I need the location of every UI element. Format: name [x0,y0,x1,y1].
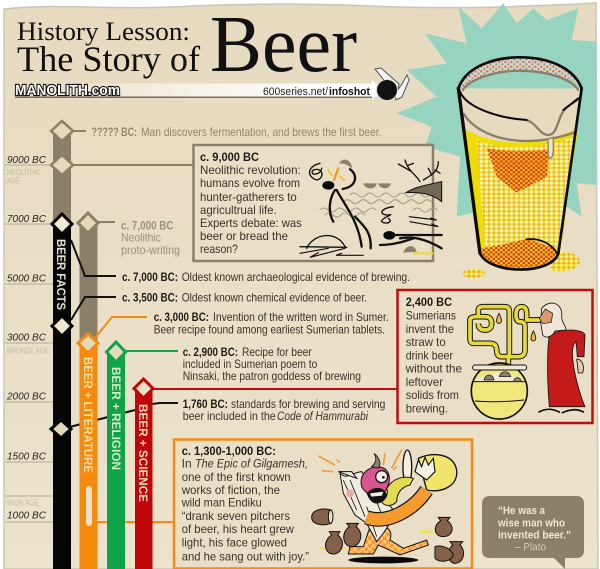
starburst behind glass [397,3,597,217]
scale of years: 7000 BC [7,214,47,225]
panel: epic of gilgamesh: wild man Endiku [181,496,262,510]
text: written word: Invention of the written word in Sumer. [213,311,389,324]
text: written word: c. 3,000 BC: [154,311,209,324]
title: History Lesson: [17,17,190,46]
panel: sumerian straw: straw to [406,336,446,349]
callout: plato quote: “He was a [498,505,546,517]
panel: epic of gilgamesh: one of the first known [182,471,291,484]
panel: epic of gilgamesh: of beer, his heart grew [182,523,295,536]
text: archaeological evidence: Oldest known archaeological evidence of brewing. [182,271,410,284]
text: chemical evidence: Oldest known chemical evidence of beer. [182,292,367,304]
panel: sumerian straw: leftover [406,376,443,389]
scale of years: AGE [7,176,20,186]
text: sumerian poem [183,346,361,383]
panel: neolithic revolution: beer or bread the [200,230,288,243]
banner: manolith and infoshot url: MANOLITH.com [15,82,120,99]
timeline bar: beer + literature: BEER + LITERATURE [81,357,95,473]
title: Beer [210,0,357,89]
text: sumerian poem: included in Sumerian poem to [183,358,317,371]
text: hammurabi: Code of Hammurabi [277,410,368,423]
panel: sumerian straw: 2,400 BC [406,296,453,309]
title: The Story of [17,39,200,79]
panel: sumerian straw: drink beer [406,350,453,362]
text: proto-writing: c. 7,000 BC [121,220,174,232]
panel: neolithic revolution: Neolithic revolution: [200,164,301,177]
banner: manolith and infoshot url: 600series.net/ [263,86,329,98]
timeline bar: beer + religion: BEER + RELIGION [109,367,123,470]
panel: sumerian straw: without the [405,362,462,376]
text: sumerian poem: Ninsaki, the patron goddess of brewing [183,370,361,383]
panel: epic of gilgamesh: c. 1,300-1,000 BC: [182,445,276,458]
panel: sumerian straw: solids from [406,389,459,402]
panel: sumerian straw: invent the [406,323,454,336]
connector lines behind bars [62,131,398,522]
text: proto-writing: proto-writing [121,244,180,257]
panel: neolithic revolution: hunter-gatherers to [200,191,297,204]
timeline bar: beer facts: BEER FACTS [54,239,68,310]
connector lines over gray bar [71,240,147,338]
text: hammurabi: 1,760 BC: [183,398,228,411]
panel: sumerian straw: Sumerians [406,310,456,322]
panel: epic of gilgamesh [174,440,472,568]
panel: epic of gilgamesh: The Epic of Gilgamesh, [195,458,308,470]
timeline bar: beer facts [51,121,73,569]
scale of years: 2000 BC [6,392,47,402]
text: sumerian poem: Recipe for beer [242,346,312,359]
timeline bar: beer + science [134,379,153,569]
timeline bar: beer + literature [78,213,98,569]
illustration: beer glass [458,57,582,278]
illustration: endiku drinking [312,450,464,563]
scale of years: BRONZE AGE [7,346,49,356]
panel: neolithic revolution: Experts debate: was [200,217,302,230]
scale of years: IRON AGE [7,498,39,508]
panel: epic of gilgamesh: light, his face glowed [182,536,287,550]
panel: epic of gilgamesh: and he sang out with joy.” [182,550,309,564]
panel: epic of gilgamesh: “drank seven pitchers [182,510,290,523]
text: hammurabi: beer included in the [183,410,276,423]
text: written word [154,311,389,336]
panel: neolithic revolution: c. 9,000 BC [200,151,260,164]
spilled beer puddles [463,252,580,278]
scale of years: 3000 BC [7,332,47,344]
text: hammurabi: standards for brewing and serving [231,398,385,411]
panel: epic of gilgamesh: works of fiction, the [181,484,280,497]
text: fermentation: ????? BC: [92,126,137,139]
panel: neolithic revolution [194,145,442,261]
callout: plato quote [482,496,584,569]
panel: neolithic revolution: agricultrual life. [200,204,277,217]
scale of years: 1000 BC [7,510,47,522]
text: chemical evidence: c. 3,500 BC: [122,292,178,304]
scale of years: NEOLITHIC [7,167,41,177]
panel: neolithic revolution: humans evolve from [200,177,300,190]
text: proto-writing: Neolithic [121,232,161,244]
panel: sumerian straw: brewing. [406,402,448,416]
callout: plato quote: – Plato [515,542,546,554]
panel: epic of gilgamesh: In [182,458,192,470]
panel: sumerian straw [398,290,592,423]
timeline bar: beer + science: BEER + SCIENCE [136,404,150,502]
text: archaeological evidence: c. 7,000 BC: [122,271,178,284]
panel: neolithic revolution: reason? [200,243,238,256]
text: chemical evidence [122,292,367,304]
icon: winged black ball [375,68,409,100]
scale of years: 5000 BC [7,274,47,284]
scale of years: 9000 BC [7,155,47,166]
text: fermentation: Man discovers fermentation, and brews the first beer. [141,126,382,139]
callout: plato quote: invented beer.” [498,530,571,542]
illustration: man drinking through straw [470,303,585,419]
scale of years [5,155,53,522]
text: written word: Beer recipe found among earliest Sumerian tablets. [154,324,385,336]
text: proto-writing [121,220,180,257]
callout: plato quote: wise man who [497,518,565,530]
illustration: cave painting [300,160,442,257]
title [17,0,357,89]
text: sumerian poem: c. 2,900 BC: [183,346,238,359]
text: hammurabi [183,398,385,423]
banner: manolith and infoshot url [15,80,382,100]
scale of years: 1500 BC [7,452,47,462]
banner: manolith and infoshot url: infoshot [329,86,370,98]
timeline bar: beer + religion [106,342,126,569]
